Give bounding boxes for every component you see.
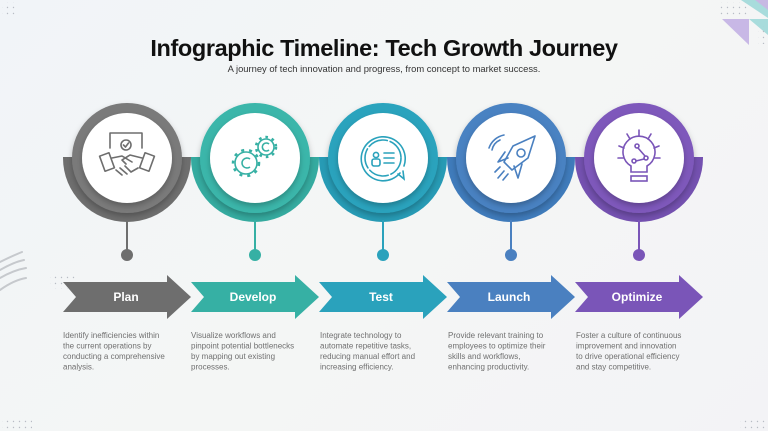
text: Launch description: [448, 331, 546, 372]
text: Launch description: employees to optimize their: [448, 342, 546, 350]
text: Plan description: the current operations by: [63, 342, 152, 350]
text: Launch description: Provide relevant training to: [448, 331, 544, 340]
text: Plan description: Identify inefficiencies within: [63, 331, 159, 340]
text: Launch description: enhancing productivity.: [448, 362, 529, 372]
icon: chat profile: [361, 137, 405, 181]
arrow: Plan: Plan: [113, 290, 139, 304]
arrow: Optimize: [575, 275, 703, 319]
decoration: top-left dots: [2, 2, 16, 18]
arrow: Launch: Launch: [488, 290, 530, 304]
arrow: Plan: [63, 275, 191, 319]
text: Plan description: [63, 331, 165, 372]
arrow: Launch: [447, 275, 575, 319]
decoration: top-right triangles: [720, 0, 768, 45]
step: Optimize: [575, 103, 703, 261]
text: Optimize description: [576, 331, 681, 372]
title: Infographic Timeline: Tech Growth Journey: [150, 35, 618, 61]
step: Develop: [191, 103, 319, 261]
text: Develop description: Visualize workflows and: [191, 331, 276, 340]
text: Test description: reducing manual effort and: [320, 352, 415, 361]
step: Plan: [63, 103, 191, 261]
icon: rocket: [489, 135, 535, 180]
arrow: Test: Test: [369, 290, 393, 304]
icon: lightbulb: [618, 130, 660, 181]
arrow: Develop: Develop: [230, 290, 276, 304]
text: Test description: automate repetitive tasks,: [320, 342, 411, 350]
decoration: left wavy lines: [0, 252, 26, 290]
text: Test description: Integrate technology to: [320, 331, 402, 340]
text: Develop description: by mapping out existing: [191, 352, 275, 361]
text: Plan description: conducting a comprehensive: [63, 352, 165, 361]
text: Plan description: analysis.: [63, 362, 94, 372]
step: Launch: [447, 103, 575, 261]
text: Launch description: skills and workflows,: [448, 352, 520, 361]
text: Develop description: processes.: [191, 362, 230, 372]
text: Optimize description: Foster a culture of continuous: [576, 331, 681, 340]
text: Test description: [320, 331, 415, 372]
icon: handshake: [100, 133, 154, 175]
step: Test: [319, 103, 447, 261]
text: Optimize description: to drive operational efficiency: [576, 352, 679, 361]
text: Develop description: [191, 331, 294, 372]
text: Develop description: pinpoint potential bottlenecks: [191, 342, 294, 350]
text: Optimize description: and stay competitive.: [576, 362, 651, 372]
subtitle: A journey of tech innovation and progress, from concept to market success.: [228, 63, 540, 74]
icon: gears: [233, 137, 276, 176]
arrow: Develop: [191, 275, 319, 319]
text: Test description: increasing efficiency.: [320, 362, 394, 372]
arrow: Optimize: Optimize: [612, 290, 663, 304]
arrow: Test: [319, 275, 447, 319]
text: Optimize description: improvement and innovation: [576, 342, 677, 350]
